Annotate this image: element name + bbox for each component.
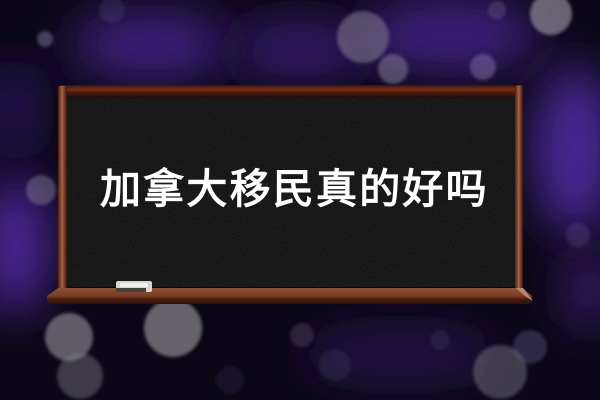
title: 加拿大移民真的好吗: [100, 166, 489, 212]
chalk eraser: [116, 281, 152, 292]
wooden frame: [47, 85, 533, 304]
blackboard surface: [66, 97, 517, 287]
